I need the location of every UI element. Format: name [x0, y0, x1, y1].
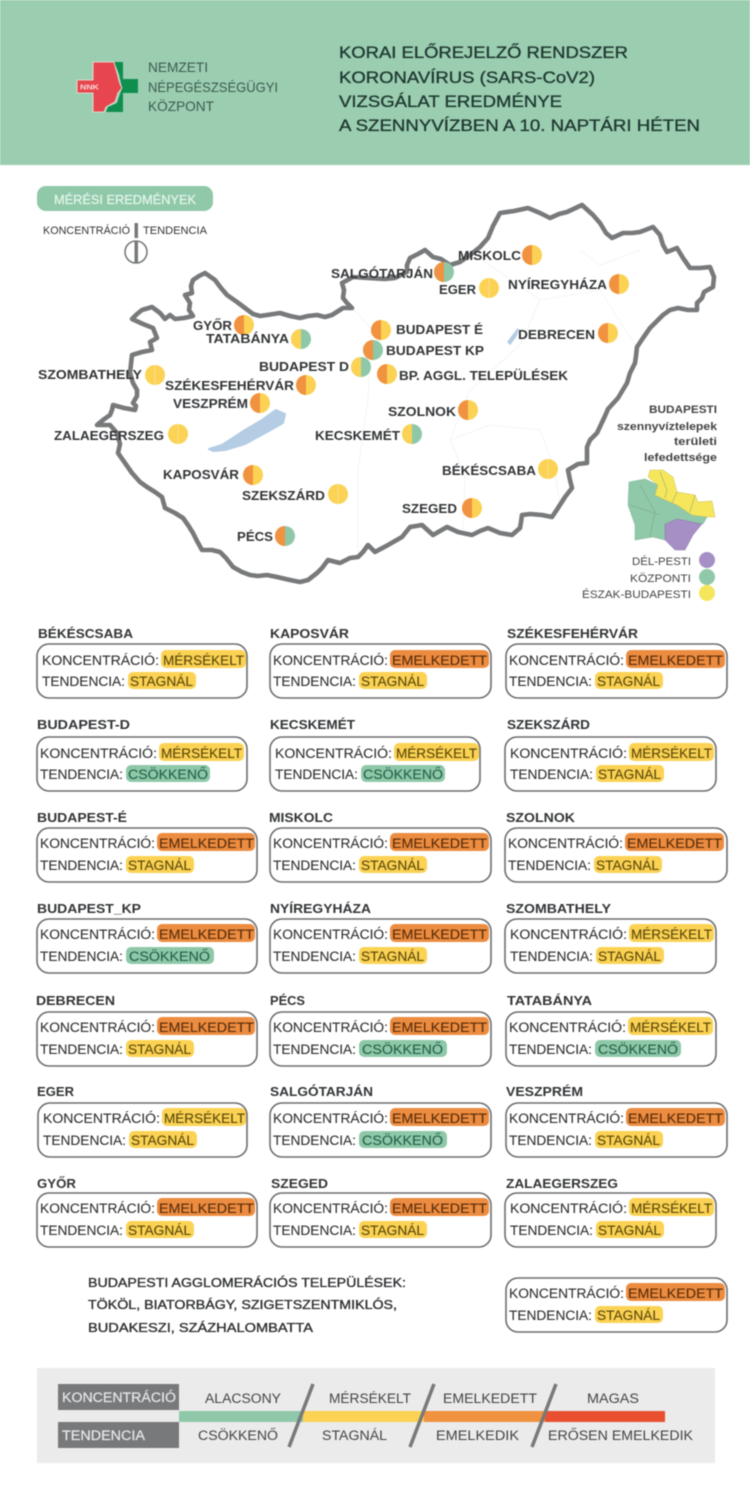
- card: Nyíregyháza: NYÍREGYHÁZA: [270, 901, 372, 916]
- marker: Nyíregyháza: NYÍREGYHÁZA: [508, 277, 608, 292]
- card: Pécs: PÉCS: [270, 993, 305, 1008]
- marker: Kaposvár: KAPOSVÁR: [163, 467, 240, 482]
- card: Debrecen: STAGNÁL: [128, 1042, 191, 1057]
- card: Budapest_KP: [37, 901, 257, 973]
- inset legend: [582, 552, 715, 601]
- scale labels: STAGNÁL: [322, 1428, 388, 1443]
- card: Veszprém: TENDENCIA:: [509, 1133, 592, 1148]
- card: Kaposvár: KAPOSVÁR: [270, 626, 350, 641]
- card: Salgótarján: [270, 1084, 491, 1157]
- card: Győr: TENDENCIA:: [40, 1223, 123, 1238]
- card: Szolnok: KONCENTRÁCIÓ:: [508, 836, 623, 851]
- card: Szekszárd: MÉRSÉKELT: [631, 746, 712, 761]
- marker: Tatabánya: [206, 329, 311, 349]
- card: agglomeration settlements: [506, 1278, 727, 1332]
- card: Miskolc: STAGNÁL: [361, 858, 424, 873]
- card: Pécs: KONCENTRÁCIÓ:: [273, 1020, 388, 1035]
- marker: Békéscsaba: BÉKÉSCSABA: [442, 463, 537, 478]
- card: Kaposvár: EMELKEDETT: [392, 653, 487, 668]
- card: Budapest_KP: CSÖKKENŐ: [129, 949, 210, 964]
- map of Hungary: [38, 205, 714, 582]
- card: Szeged: EMELKEDETT: [392, 1201, 487, 1216]
- card: Miskolc: KONCENTRÁCIÓ:: [273, 836, 388, 851]
- card: Kaposvár: TENDENCIA:: [273, 674, 356, 689]
- card: Szombathely: STAGNÁL: [598, 949, 661, 964]
- card: Debrecen: [36, 993, 257, 1066]
- marker: Salgótarján: [331, 262, 454, 282]
- logo text: NEMZETI: [148, 59, 208, 75]
- card: Debrecen: KONCENTRÁCIÓ:: [40, 1020, 155, 1035]
- logo text: NÉPEGÉSZSÉGÜGYI: [148, 78, 278, 95]
- card: Zalaegerszeg: [505, 1176, 716, 1247]
- card: agglomeration settlements: EMELKEDETT: [628, 1286, 723, 1301]
- card: Kaposvár: STAGNÁL: [361, 674, 424, 689]
- marker: Szombathely: [38, 365, 165, 385]
- card: Budapest_KP: KONCENTRÁCIÓ:: [40, 927, 155, 942]
- card: Tatabánya: TATABÁNYA: [507, 993, 593, 1008]
- card: Szeged: SZEGED: [271, 1176, 328, 1191]
- card: Szolnok: TENDENCIA:: [508, 858, 591, 873]
- card: Miskolc: TENDENCIA:: [273, 858, 356, 873]
- marker: Eger: EGER: [439, 282, 477, 297]
- scale labels: ALACSONY: [205, 1391, 281, 1406]
- card: Székesfehérvár: STAGNÁL: [597, 674, 660, 689]
- county lines: [352, 250, 640, 557]
- marker: Zalaegerszeg: ZALAEGERSZEG: [54, 428, 164, 443]
- card: Nyíregyháza: [270, 901, 491, 973]
- card: Szeged: [270, 1176, 491, 1247]
- marker: Székesfehérvár: SZÉKESFEHÉRVÁR: [165, 378, 295, 393]
- logo text: [148, 59, 278, 114]
- card: Szombathely: MÉRSÉKELT: [631, 927, 712, 942]
- marker: Szekszárd: [242, 484, 348, 504]
- card: Szombathely: TENDENCIA:: [510, 949, 593, 964]
- card: Veszprém: [506, 1084, 727, 1157]
- title: A SZENNYVÍZBEN A 10. NAPTÁRI HÉTEN: [339, 116, 700, 135]
- card: Debrecen: TENDENCIA:: [40, 1042, 123, 1057]
- inset heading: [617, 404, 718, 464]
- agglomeration settlements text: BUDAPESTI AGGLOMERÁCIÓS TELEPÜLÉSEK:: [88, 1275, 406, 1290]
- lake Balaton: [209, 410, 285, 451]
- card: Kaposvár: [270, 626, 491, 698]
- card: Szeged: STAGNÁL: [361, 1223, 424, 1238]
- marker: Debrecen: DEBRECEN: [518, 327, 595, 342]
- scale labels: MÉRSÉKELT: [329, 1391, 411, 1406]
- lake Tisza: [508, 329, 518, 344]
- marker: agglomeration settlements: BP. AGGL. TELEPÜLÉSEK: [399, 368, 569, 383]
- inset heading: BUDAPESTI: [649, 404, 717, 416]
- card: Békéscsaba: BÉKÉSCSABA: [38, 626, 134, 641]
- marker: Győr: GYŐR: [193, 318, 233, 333]
- card: Miskolc: MISKOLC: [269, 810, 334, 825]
- title: KORAI ELŐREJELZŐ RENDSZER: [339, 43, 628, 62]
- marker: Budapest D: BUDAPEST D: [259, 359, 349, 374]
- card: Salgótarján: CSÖKKENŐ: [362, 1133, 443, 1148]
- marker: Szombathely: SZOMBATHELY: [38, 367, 142, 382]
- card: Budapest-É: BUDAPEST-É: [37, 810, 127, 825]
- marker key: KONCENTRÁCIÓ: [43, 224, 130, 237]
- card: Székesfehérvár: KONCENTRÁCIÓ:: [509, 653, 624, 668]
- marker: Debrecen: [518, 323, 618, 343]
- logo text: KÖZPONT: [148, 97, 214, 114]
- marker: Szolnok: [388, 400, 478, 420]
- marker: Veszprém: VESZPRÉM: [173, 396, 248, 411]
- scale labels: ERŐSEN EMELKEDIK: [548, 1428, 693, 1443]
- marker: Veszprém: [173, 393, 270, 413]
- scale labels: [198, 1391, 693, 1443]
- card: Kecskemét: [270, 717, 480, 791]
- card: Nyíregyháza: EMELKEDETT: [392, 927, 487, 942]
- card: Salgótarján: SALGÓTARJÁN: [270, 1084, 373, 1099]
- inset legend: KÖZPONTI: [630, 573, 691, 585]
- card: Tatabánya: MÉRSÉKELT: [630, 1020, 711, 1035]
- marker: Nyíregyháza: [508, 274, 629, 294]
- title: VIZSGÁLAT EREDMÉNYE: [339, 92, 562, 111]
- row label: concentration: [58, 1384, 179, 1410]
- marker: agglomeration settlements: [377, 364, 569, 384]
- marker: Tatabánya: TATABÁNYA: [206, 331, 290, 346]
- card: Székesfehérvár: TENDENCIA:: [509, 674, 592, 689]
- agglomeration settlements text: [88, 1275, 406, 1335]
- card: Salgótarján: EMELKEDETT: [392, 1111, 487, 1126]
- scale labels: EMELKEDETT: [443, 1391, 537, 1406]
- card: Nyíregyháza: KONCENTRÁCIÓ:: [273, 927, 388, 942]
- marker: Kecskemét: KECSKEMÉT: [315, 428, 400, 443]
- card: agglomeration settlements: TENDENCIA:: [509, 1308, 592, 1323]
- inset heading: lefedettsége: [644, 452, 717, 464]
- row label: concentration: KONCENTRÁCIÓ: [62, 1390, 176, 1405]
- agglomeration settlements text: TÖKÖL, BIATORBÁGY, SZIGETSZENTMIKLÓS,: [88, 1297, 397, 1312]
- card: Győr: KONCENTRÁCIÓ:: [40, 1201, 155, 1216]
- card: Pécs: [270, 993, 491, 1066]
- card: Tatabánya: [506, 993, 716, 1066]
- title: KORONAVÍRUS (SARS-CoV2): [339, 68, 595, 87]
- row label: tendency: [58, 1422, 179, 1448]
- card: Eger: [37, 1084, 247, 1157]
- card: Eger: STAGNÁL: [131, 1133, 194, 1148]
- card: Pécs: CSÖKKENŐ: [362, 1042, 443, 1057]
- card: Békéscsaba: KONCENTRÁCIÓ:: [42, 653, 159, 668]
- card: Budapest-D: BUDAPEST-D: [37, 717, 130, 732]
- card: Szekszárd: KONCENTRÁCIÓ:: [510, 746, 627, 761]
- marker: Miskolc: MISKOLC: [458, 248, 522, 263]
- marker: Eger: [439, 278, 499, 298]
- row label: tendency: TENDENCIA: [62, 1428, 145, 1443]
- card: Győr: EMELKEDETT: [159, 1201, 254, 1216]
- marker: Pécs: [237, 526, 295, 546]
- card: Budapest-É: EMELKEDETT: [159, 836, 254, 851]
- scale bar: [179, 1411, 665, 1422]
- card: Szeged: KONCENTRÁCIÓ:: [273, 1201, 388, 1216]
- logo: NNK cross: [77, 62, 138, 112]
- inset heading: szennyvíztelepek: [617, 421, 718, 433]
- marker: Szolnok: SZOLNOK: [388, 404, 457, 419]
- marker key: [43, 223, 208, 263]
- card: Zalaegerszeg: KONCENTRÁCIÓ:: [510, 1201, 627, 1216]
- scale labels: MAGAS: [587, 1391, 639, 1406]
- card: Tatabánya: CSÖKKENŐ: [598, 1042, 678, 1057]
- card: Szombathely: [505, 901, 716, 973]
- marker: Miskolc: [458, 245, 542, 265]
- card: agglomeration settlements: STAGNÁL: [597, 1308, 660, 1323]
- marker: Budapest KP: [363, 340, 484, 360]
- card: Kecskemét: KECSKEMÉT: [270, 717, 355, 732]
- card: Békéscsaba: TENDENCIA:: [42, 674, 125, 689]
- section pill: measurement results: MÉRÉSI EREDMÉNYEK: [54, 192, 196, 207]
- marker: Szekszárd: SZEKSZÁRD: [242, 488, 325, 503]
- card: Kaposvár: KONCENTRÁCIÓ:: [273, 653, 388, 668]
- card: Budapest_KP: TENDENCIA:: [40, 949, 123, 964]
- card: Székesfehérvár: SZÉKESFEHÉRVÁR: [507, 626, 639, 641]
- card: Szekszárd: SZEKSZÁRD: [507, 717, 590, 732]
- marker: Kaposvár: [163, 465, 263, 485]
- marker: Salgótarján: SALGÓTARJÁN: [331, 266, 433, 281]
- card: Budapest-É: KONCENTRÁCIÓ:: [40, 836, 155, 851]
- card: Budapest-D: TENDENCIA:: [40, 767, 123, 782]
- marker: Szeged: [402, 498, 482, 518]
- card: Budapest_KP: EMELKEDETT: [159, 927, 254, 942]
- separators: [289, 1384, 556, 1447]
- card: Szekszárd: STAGNÁL: [598, 767, 661, 782]
- card: Székesfehérvár: EMELKEDETT: [628, 653, 723, 668]
- card: Nyíregyháza: TENDENCIA:: [273, 949, 356, 964]
- marker: Budapest É: BUDAPEST É: [396, 322, 483, 337]
- card: Békéscsaba: MÉRSÉKELT: [163, 653, 244, 668]
- card: Szekszárd: [505, 717, 716, 791]
- card: Zalaegerszeg: MÉRSÉKELT: [631, 1201, 712, 1216]
- scale legend: [37, 1368, 715, 1463]
- card: Szekszárd: TENDENCIA:: [510, 767, 593, 782]
- card: Zalaegerszeg: TENDENCIA:: [510, 1223, 593, 1238]
- agglomeration settlements text: BUDAKESZI, SZÁZHALOMBATTA: [88, 1320, 313, 1335]
- marker: Szeged: SZEGED: [402, 501, 457, 516]
- Budapest wastewater coverage inset: [582, 404, 718, 601]
- card: Győr: [37, 1176, 257, 1247]
- card: Budapest-D: KONCENTRÁCIÓ:: [40, 746, 157, 761]
- card: Eger: EGER: [37, 1084, 75, 1099]
- card: Szolnok: [505, 810, 727, 882]
- card: Budapest-D: [37, 717, 247, 791]
- card: Salgótarján: KONCENTRÁCIÓ:: [273, 1111, 388, 1126]
- card: Szolnok: SZOLNOK: [506, 810, 576, 825]
- card: Veszprém: VESZPRÉM: [506, 1084, 583, 1099]
- card: Budapest-D: MÉRSÉKELT: [161, 746, 242, 761]
- card: Kecskemét: MÉRSÉKELT: [396, 746, 477, 761]
- card: Szolnok: STAGNÁL: [596, 858, 659, 873]
- header band: [0, 0, 750, 165]
- card: Pécs: EMELKEDETT: [392, 1020, 487, 1035]
- card: Budapest-É: STAGNÁL: [128, 858, 191, 873]
- marker: Pécs: PÉCS: [237, 529, 273, 544]
- card: Szolnok: EMELKEDETT: [627, 836, 722, 851]
- card: Eger: KONCENTRÁCIÓ:: [43, 1111, 160, 1126]
- card: Győr: STAGNÁL: [128, 1223, 191, 1238]
- card: Békéscsaba: [37, 626, 247, 698]
- title: [339, 43, 700, 135]
- card: Nyíregyháza: STAGNÁL: [361, 949, 424, 964]
- country border: [97, 205, 714, 582]
- card: agglomeration settlements: KONCENTRÁCIÓ:: [509, 1286, 624, 1301]
- logo: NNK cross: NNK: [80, 84, 99, 92]
- marker: Győr: [193, 315, 254, 335]
- section pill: measurement results: [37, 186, 213, 211]
- card: Zalaegerszeg: ZALAEGERSZEG: [506, 1176, 618, 1191]
- card: Győr: GYŐR: [37, 1176, 77, 1191]
- card: Veszprém: KONCENTRÁCIÓ:: [509, 1111, 624, 1126]
- marker key: TENDENCIA: [143, 225, 208, 237]
- card: Székesfehérvár: [506, 626, 727, 698]
- card: Szeged: TENDENCIA:: [273, 1223, 356, 1238]
- marker: Budapest KP: BUDAPEST KP: [386, 343, 484, 358]
- card: Tatabánya: KONCENTRÁCIÓ:: [509, 1020, 626, 1035]
- inset map: [628, 470, 715, 550]
- card: Szombathely: SZOMBATHELY: [506, 901, 611, 916]
- card: Debrecen: EMELKEDETT: [159, 1020, 254, 1035]
- card: Eger: TENDENCIA:: [43, 1133, 126, 1148]
- card: Tatabánya: TENDENCIA:: [509, 1042, 592, 1057]
- card: Kecskemét: KONCENTRÁCIÓ:: [275, 746, 392, 761]
- marker: Székesfehérvár: [165, 375, 316, 395]
- marker: Zalaegerszeg: [54, 424, 188, 444]
- card: Kecskemét: TENDENCIA:: [275, 767, 358, 782]
- card: Salgótarján: TENDENCIA:: [273, 1133, 356, 1148]
- inset heading: területi: [674, 436, 717, 448]
- card: Debrecen: DEBRECEN: [36, 993, 115, 1008]
- card: Eger: MÉRSÉKELT: [164, 1111, 245, 1126]
- scale labels: CSÖKKENŐ: [198, 1428, 278, 1443]
- inset legend: DÉL-PESTI: [632, 555, 691, 568]
- card: Zalaegerszeg: STAGNÁL: [598, 1223, 661, 1238]
- card: Budapest-D: CSÖKKENŐ: [128, 767, 208, 782]
- card: Szombathely: KONCENTRÁCIÓ:: [510, 927, 627, 942]
- card: Veszprém: STAGNÁL: [597, 1133, 660, 1148]
- marker: Békéscsaba: [442, 459, 558, 479]
- card: Budapest-É: [37, 810, 257, 882]
- inset legend: ÉSZAK-BUDAPESTI: [582, 588, 691, 601]
- card: Kecskemét: CSÖKKENŐ: [363, 767, 443, 782]
- marker: Budapest É: [371, 320, 483, 340]
- marker: Kecskemét: [315, 424, 422, 444]
- card: Pécs: TENDENCIA:: [273, 1042, 356, 1057]
- card: Miskolc: [269, 810, 491, 882]
- card: Békéscsaba: STAGNÁL: [130, 674, 193, 689]
- card: Miskolc: EMELKEDETT: [392, 836, 487, 851]
- card: Budapest_KP: BUDAPEST_KP: [37, 901, 141, 916]
- card: Budapest-É: TENDENCIA:: [40, 858, 123, 873]
- marker: Budapest D: [259, 357, 371, 377]
- card: Veszprém: EMELKEDETT: [628, 1111, 723, 1126]
- scale labels: EMELKEDIK: [436, 1428, 519, 1443]
